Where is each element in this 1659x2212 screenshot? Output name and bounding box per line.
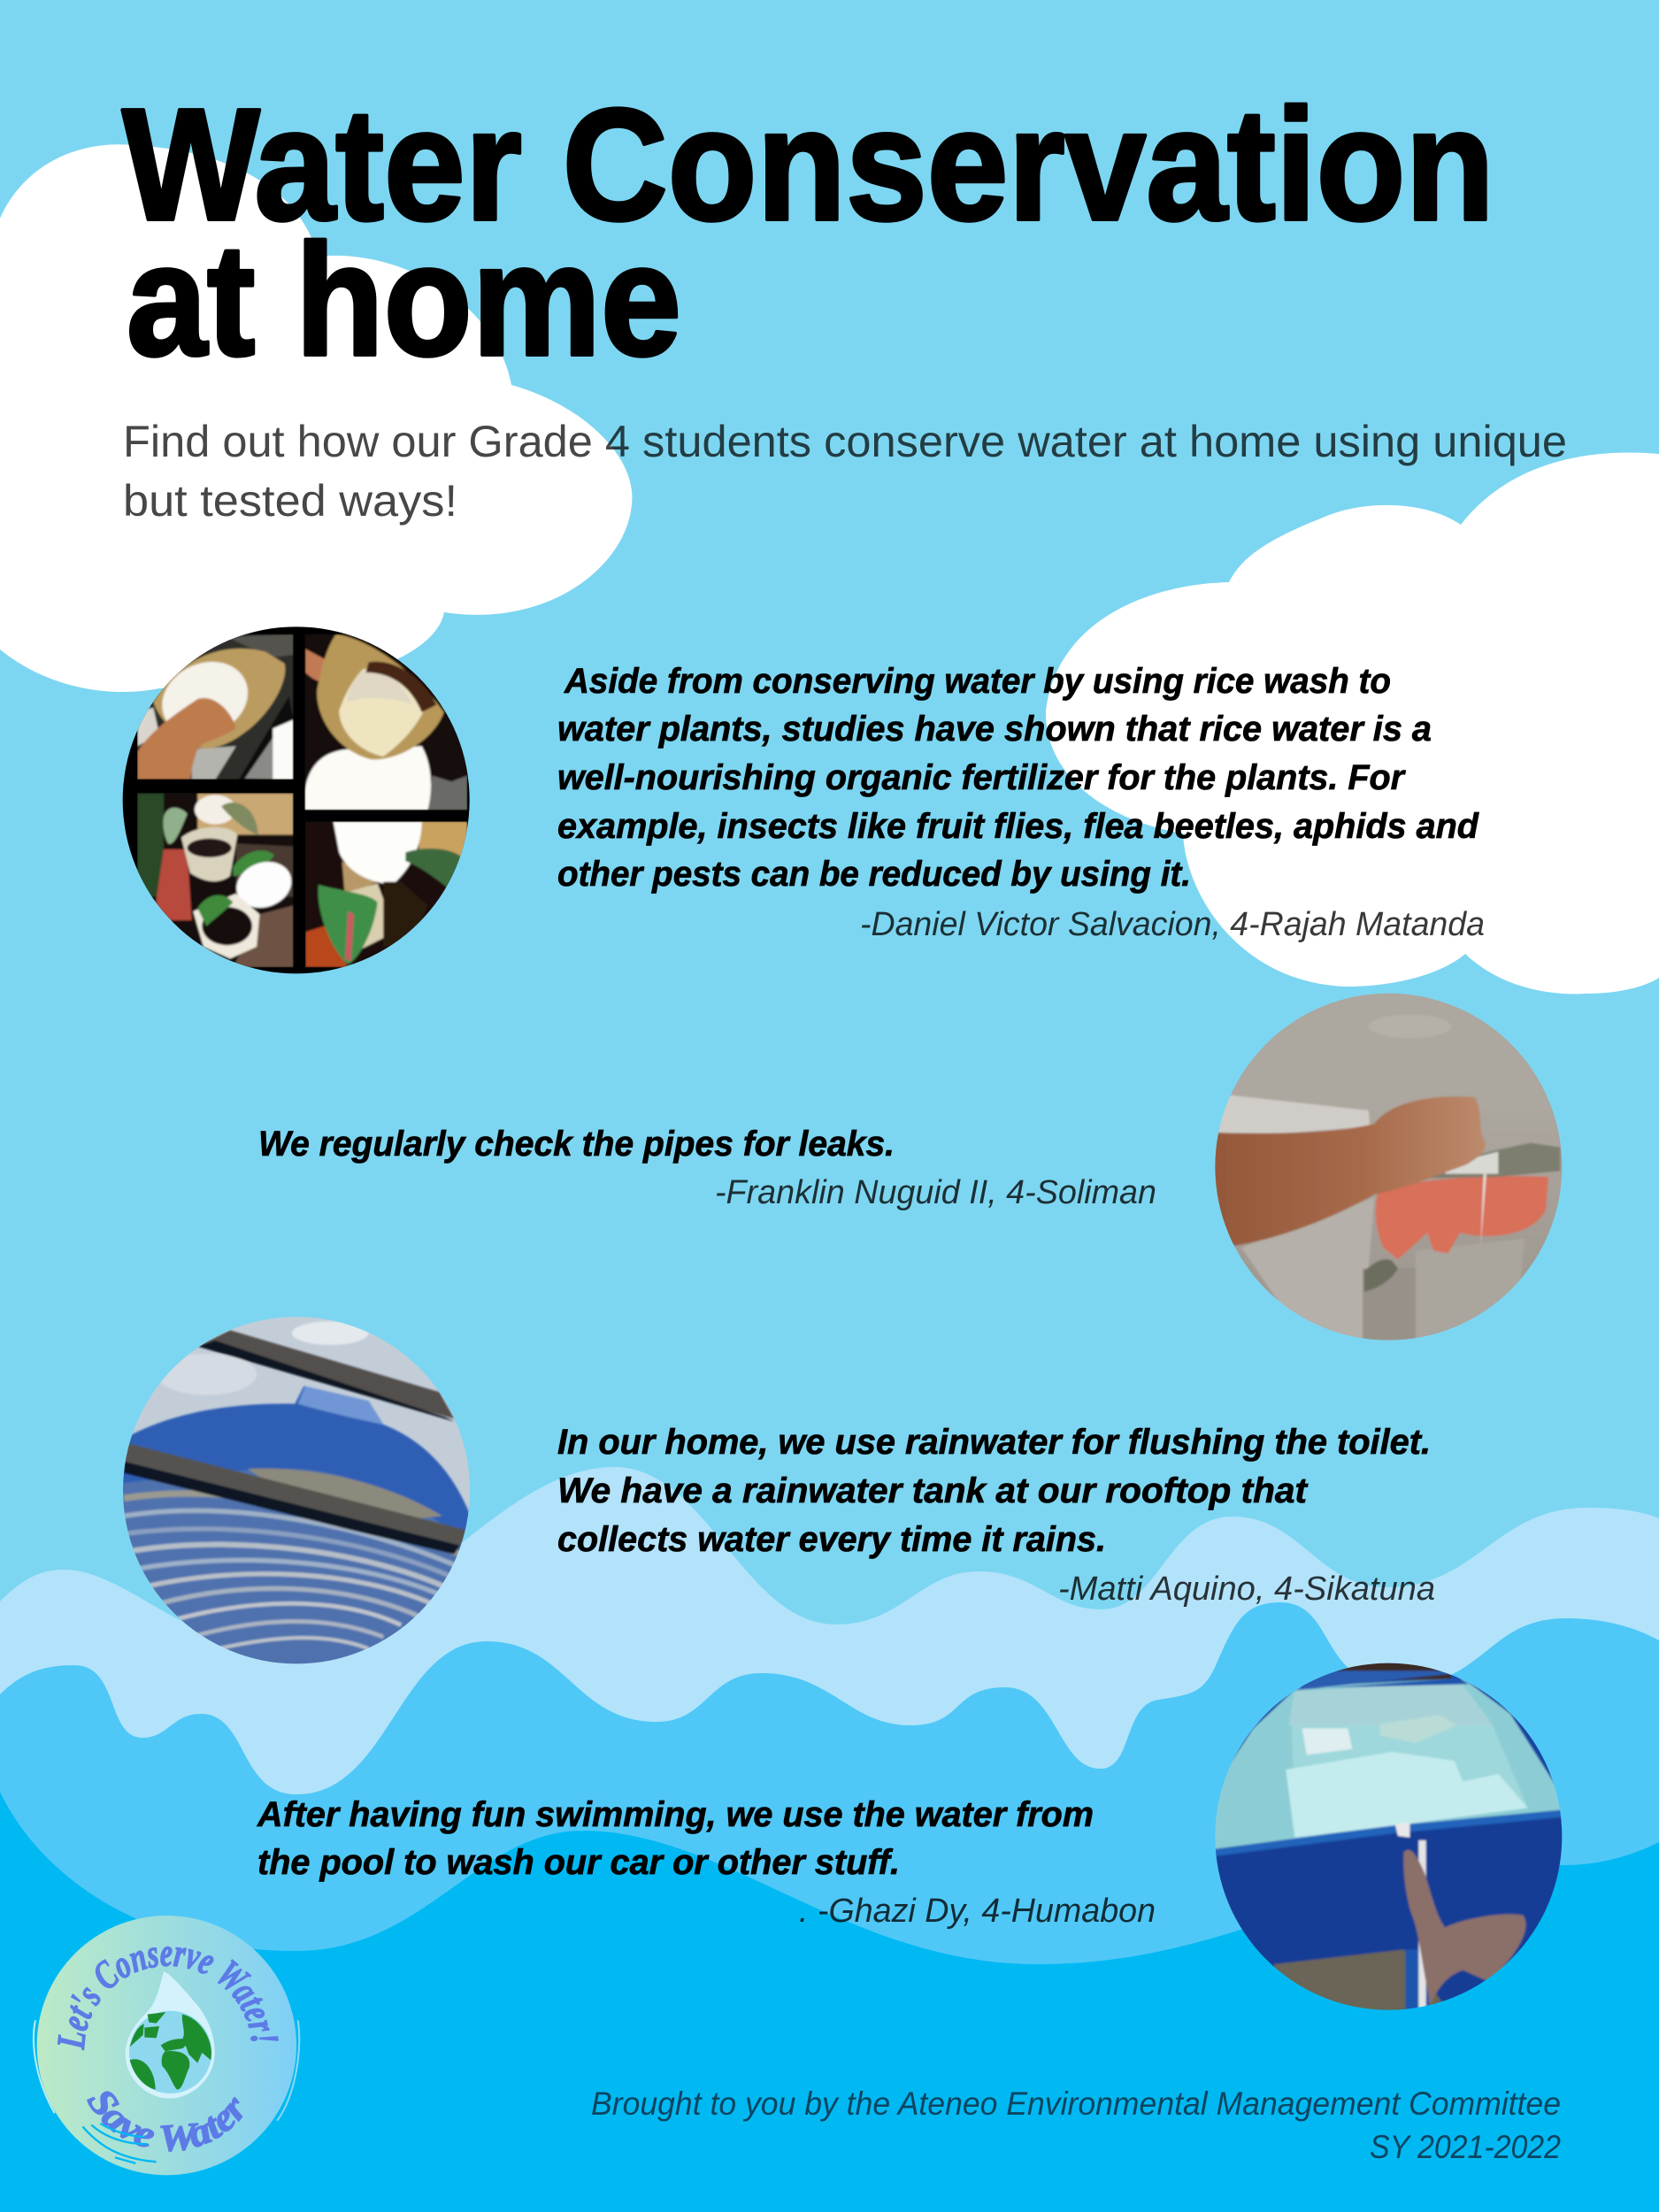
quote 1 attribution: -Daniel Victor Salvacion, 4-Rajah Matanda [860, 906, 1485, 943]
photo: rice wash collage [118, 622, 475, 979]
footer credit [591, 2085, 1561, 2165]
title: Water Conservation [122, 76, 1494, 254]
quote 4 text [257, 1795, 1094, 1882]
deep wave [0, 1792, 1659, 2212]
quote 3 text: collects water every time it rains. [557, 1520, 1106, 1559]
quote 3 attribution: -Matti Aquino, 4-Sikatuna [1058, 1571, 1435, 1608]
subtitle [123, 417, 1567, 526]
quote 3 text: We have a rainwater tank at our rooftop that [557, 1471, 1309, 1510]
title [122, 76, 1494, 389]
photo: checking pipes for leaks [1212, 991, 1566, 1345]
footer credit: SY 2021-2022 [1370, 2129, 1561, 2165]
photo: rainwater tank [118, 1316, 472, 1670]
quote 3 text: In our home, we use rainwater for flushing the toilet. [557, 1423, 1431, 1462]
quote 4 attribution: . -Ghazi Dy, 4-Humabon [799, 1893, 1156, 1930]
light wave [0, 1467, 1659, 2212]
subtitle: but tested ways! [123, 476, 457, 526]
subtitle: Find out how our Grade 4 students conserve water at home using unique [123, 417, 1567, 466]
mid wave [0, 1602, 1659, 2212]
quote 1 text [557, 662, 1480, 894]
icon: water drop with globe [126, 1971, 215, 2099]
quote 4 text: the pool to wash our car or other stuff. [257, 1843, 900, 1882]
title: at home [127, 211, 681, 389]
quote 1 text: example, insects like fruit flies, flea beetles, aphids and [557, 807, 1480, 846]
quote 1 text: Aside from conserving water by using rice wash to [564, 662, 1391, 701]
quote 1 text: water plants, studies have shown that rice water is a [557, 710, 1432, 749]
right cloud [1046, 453, 1659, 994]
quote 1 text: well-nourishing organic fertilizer for the plants. For [557, 758, 1406, 797]
quote 4 text: After having fun swimming, we use the water from [257, 1795, 1094, 1834]
photo: swimming pool [1212, 1661, 1566, 2015]
quote 2 text: We regularly check the pipes for leaks. [258, 1125, 895, 1164]
quote 2 attribution: -Franklin Nuguid II, 4-Soliman [715, 1174, 1156, 1211]
badge text: top arc: Let's Conserve Water! [57, 1947, 279, 2051]
quote 1 text: other pests can be reduced by using it. [557, 855, 1191, 894]
quote 3 text [557, 1423, 1431, 1559]
badge text: bottom arc: Save Water [87, 2091, 242, 2152]
footer credit: Brought to you by the Ateneo Environmental Management Committee [591, 2085, 1561, 2122]
left cloud [0, 144, 632, 692]
badge: Let's Conserve Water [32, 1916, 301, 2175]
